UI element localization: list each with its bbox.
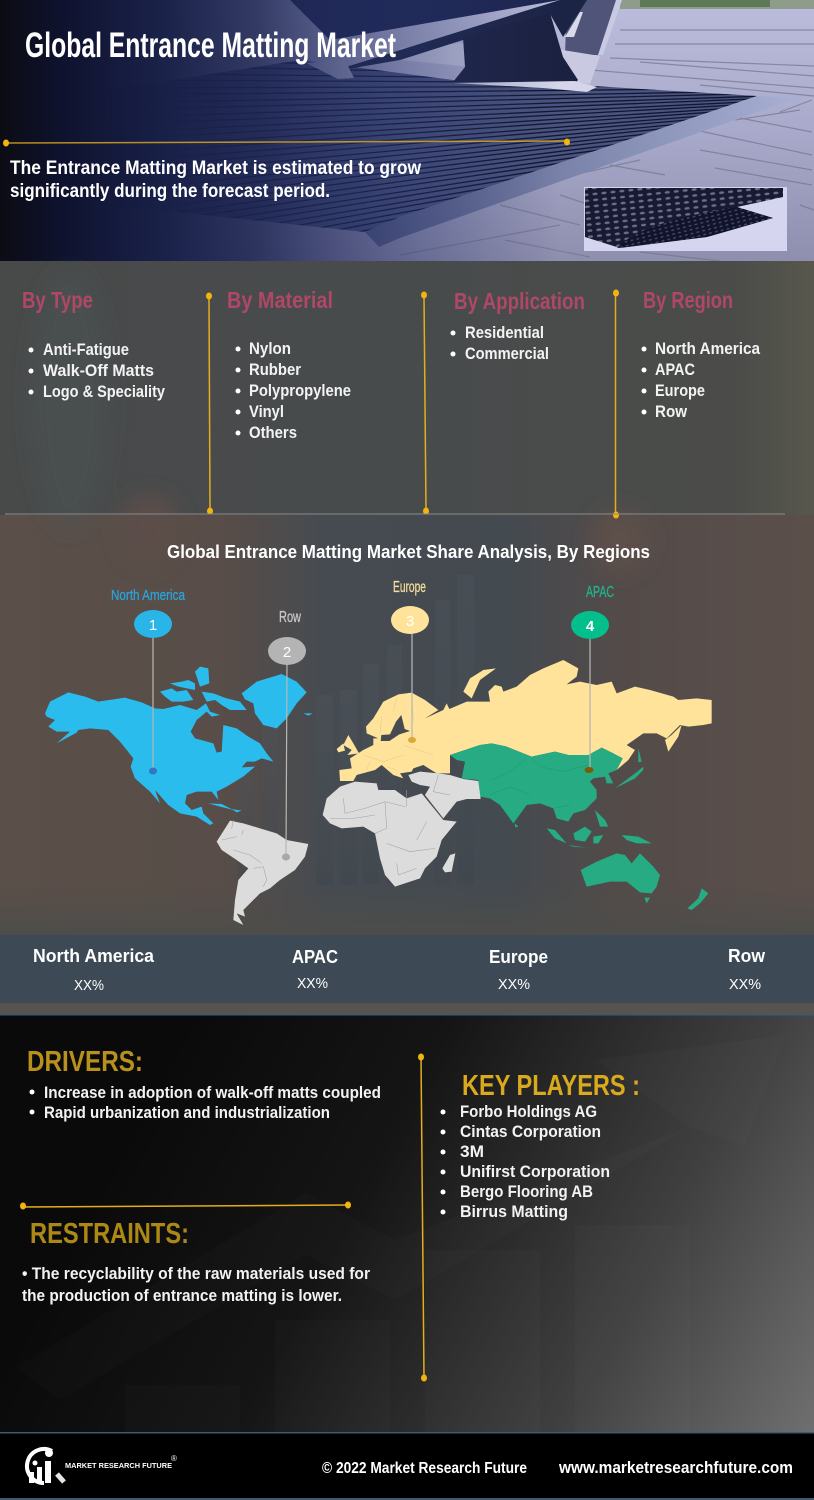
list: materials: Rubber: [249, 360, 301, 379]
list: materials: Nylon: [249, 339, 291, 358]
list: drivers: Increase in adoption of walk-off matts coupled: [44, 1083, 381, 1102]
website: www.marketresearchfuture.com: [558, 1458, 793, 1477]
list: key players: Birrus Matting: [460, 1202, 568, 1221]
list: types: Walk-Off Matts: [43, 361, 154, 380]
label: APAC: APAC: [586, 584, 614, 601]
list: regions: North America: [655, 339, 760, 358]
list: types: [28, 340, 165, 401]
list: key players: Unifirst Corporation: [460, 1162, 610, 1181]
map region: APAC: [450, 743, 708, 910]
label: Europe: Europe: [393, 579, 426, 596]
inset mat sample: [584, 187, 787, 251]
table column: APAC: [292, 947, 338, 992]
map: the Americas: [45, 667, 313, 925]
title: Global Entrance Matting Market: [25, 26, 396, 65]
heading: by material: By Material: [227, 287, 333, 313]
pin: APAC: 4: [586, 618, 595, 635]
text: restraints: [22, 1264, 370, 1305]
list: regions: APAC: [655, 360, 695, 379]
table column: North America: XX%: [74, 977, 104, 994]
panel: by material: [227, 287, 351, 442]
copyright: © 2022 Market Research Future: [322, 1460, 527, 1477]
list: materials: Polypropylene: [249, 381, 351, 400]
table column: North America: North America: [33, 946, 155, 966]
list: key players: Cintas Corporation: [460, 1122, 601, 1141]
list: key players: Forbo Holdings AG: [460, 1102, 597, 1121]
hero description: [10, 158, 421, 202]
pin: Row: 2: [283, 644, 291, 661]
heading: by type: By Type: [22, 287, 93, 313]
list: key players: Bergo Flooring AB: [460, 1182, 593, 1201]
table column: Europe: [489, 947, 548, 993]
pin: APAC: [571, 584, 614, 773]
heading: drivers: DRIVERS:: [27, 1046, 143, 1078]
table column: North America: [33, 946, 155, 994]
list: drivers: [30, 1083, 381, 1122]
panel: hero banner: [0, 0, 814, 261]
text: restraints: • The recyclability of the raw materials used for: [22, 1264, 370, 1283]
hero photo: person's leg: [290, 0, 597, 92]
list: applications: Commercial: [465, 344, 549, 363]
background: blurred hands: [30, 270, 648, 570]
table column: APAC: XX%: [297, 975, 328, 992]
divider: material and application: [421, 292, 429, 514]
hero description: significantly during the forecast period.: [10, 181, 330, 202]
table column: APAC: APAC: [292, 947, 338, 967]
table column: Row: [728, 946, 766, 993]
map region: Africa and Middle East: [323, 772, 481, 887]
divider: type and material: [206, 292, 213, 514]
pin: Row: [268, 609, 306, 860]
list: key players: 3M: [460, 1142, 484, 1161]
heading: by region: By Region: [643, 287, 733, 313]
hero colour fade: [0, 0, 560, 261]
list: applications: Residential: [465, 323, 544, 342]
list: materials: Others: [249, 423, 297, 442]
logo wordmark: MARKET RESEARCH FUTURE: [65, 1463, 172, 1470]
pin: North America: 1: [149, 617, 157, 634]
panel: by type: [22, 287, 165, 401]
heading: restraints: RESTRAINTS:: [30, 1218, 189, 1250]
label: North America: North America: [111, 587, 186, 604]
list: types: Anti-Fatigue: [43, 340, 129, 359]
divider: vertical gold line: [418, 1054, 427, 1382]
panel: drivers, restraints and key players: [0, 1014, 814, 1432]
panel: regional share table: [0, 935, 814, 1015]
heading: by application: By Application: [454, 288, 585, 314]
hero photo: pavement: [0, 0, 814, 261]
table column: Row: XX%: [729, 976, 761, 993]
map region: Europe and Russia: [337, 660, 712, 781]
map region: North America: [45, 667, 313, 825]
hero divider: gold line: [3, 138, 570, 146]
divider: drivers and restraints: [20, 1202, 351, 1210]
list: regions: [642, 339, 760, 421]
hero photo: mat: [188, 60, 787, 247]
panel: by region: [642, 287, 760, 421]
panel: segmentation and map background: [0, 261, 814, 935]
map: Europe, Asia, Africa and Oceania: [323, 660, 712, 910]
chart: world map by region: [45, 660, 712, 925]
list: regions: Europe: [655, 381, 705, 400]
map region: South America: [217, 820, 308, 925]
list: types: Logo & Speciality: [43, 382, 165, 401]
list: applications: [450, 323, 549, 363]
panel: footer: [0, 1432, 814, 1500]
registered mark: ®: [171, 1454, 177, 1463]
table column: Europe: Europe: [489, 947, 548, 967]
heading: market share analysis: Global Entrance Matting Market Share Analysis, By Regions: [167, 541, 650, 562]
table column: Europe: XX%: [498, 976, 530, 993]
background: faint bar chart: [238, 575, 474, 885]
icon: logo: [27, 1449, 64, 1483]
label: Row: Row: [279, 609, 301, 626]
heading: key players: KEY PLAYERS :: [462, 1070, 640, 1102]
pin: North America: [111, 587, 186, 774]
text: restraints: the production of entrance matting is lower.: [22, 1286, 342, 1305]
list: drivers: Rapid urbanization and industrialization: [44, 1103, 330, 1122]
background: faint growth arrow and bars: [16, 1035, 785, 1432]
pin: Europe: [391, 579, 429, 743]
hero description: The Entrance Matting Market is estimated to grow: [10, 158, 421, 179]
hero photo: step behind mat: [400, 40, 600, 84]
table column: Row: Row: [728, 946, 766, 966]
list: materials: [236, 339, 351, 442]
pin: Europe: 3: [406, 613, 414, 630]
list: materials: Vinyl: [249, 402, 284, 421]
list: regions: Row: [655, 402, 688, 421]
divider: application and region: [613, 290, 619, 518]
panel: by application: [450, 288, 585, 363]
hero photo: door frame: [565, 0, 622, 55]
list: key players: [440, 1102, 610, 1221]
